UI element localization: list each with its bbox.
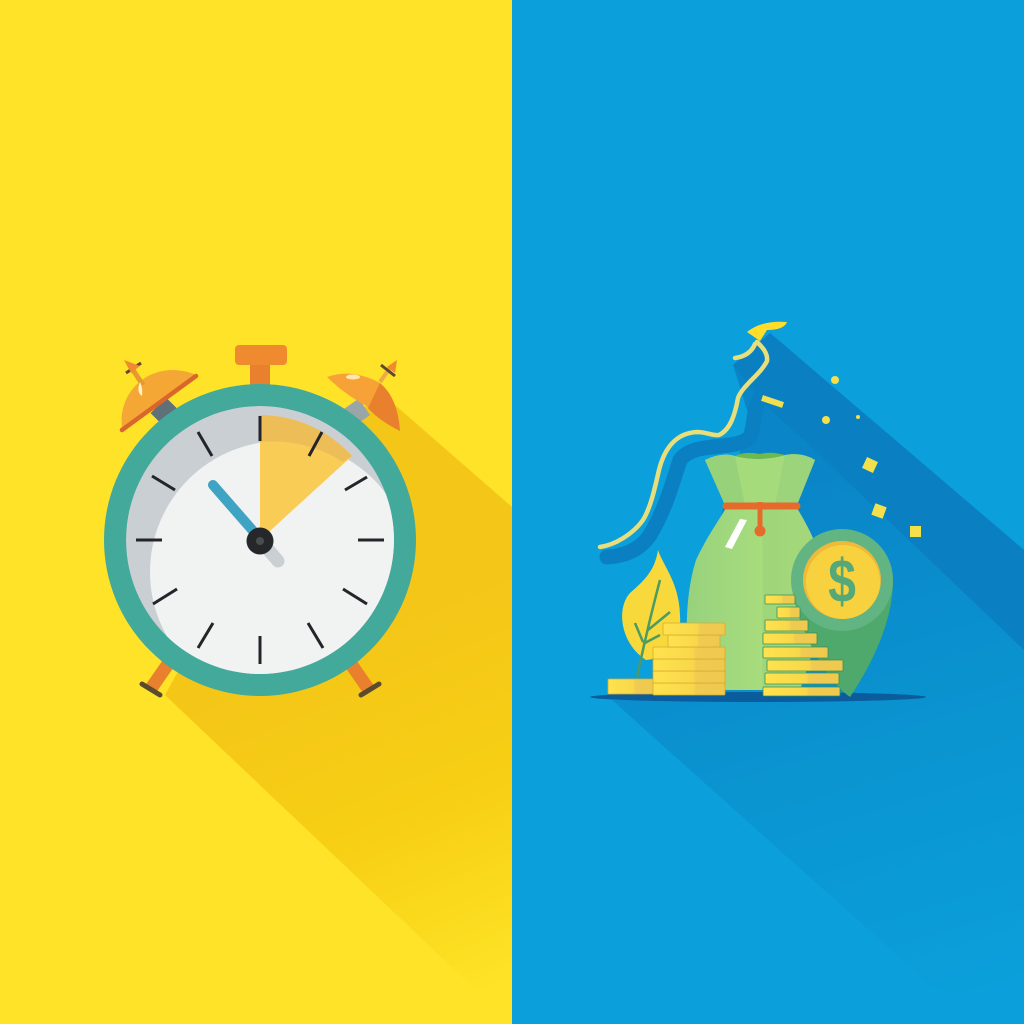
darker shadow band [733, 333, 1024, 650]
hour tick marks [136, 416, 384, 664]
long shadow of money bag [612, 333, 1024, 1024]
leaf plant [622, 550, 680, 677]
right bell [327, 360, 400, 431]
bag tie [726, 502, 797, 536]
panel: yellow time background [0, 0, 512, 1024]
clock outer ring [104, 384, 416, 696]
bag highlight [725, 519, 747, 549]
money bag [687, 453, 830, 690]
icon: money bag with coins [590, 322, 926, 702]
clock top button [235, 345, 287, 390]
highlighted time wedge [260, 415, 352, 540]
rope shadow [607, 384, 772, 557]
coin stack: right [763, 595, 843, 696]
panel: blue money background [512, 0, 1024, 1024]
icon: alarm clock [104, 345, 416, 703]
flying coin bits [822, 376, 921, 537]
bag drawstring rope [600, 342, 767, 547]
clock hands [213, 485, 278, 561]
coin stack: left [608, 623, 725, 695]
left bell [122, 360, 197, 431]
dollar sign: $ [828, 547, 856, 615]
clock feet [142, 664, 379, 695]
long shadow of clock [165, 405, 512, 946]
clock face [126, 406, 394, 674]
ground shadow [590, 692, 926, 702]
rope tassel [735, 322, 787, 405]
location pin with dollar coin [791, 529, 893, 697]
